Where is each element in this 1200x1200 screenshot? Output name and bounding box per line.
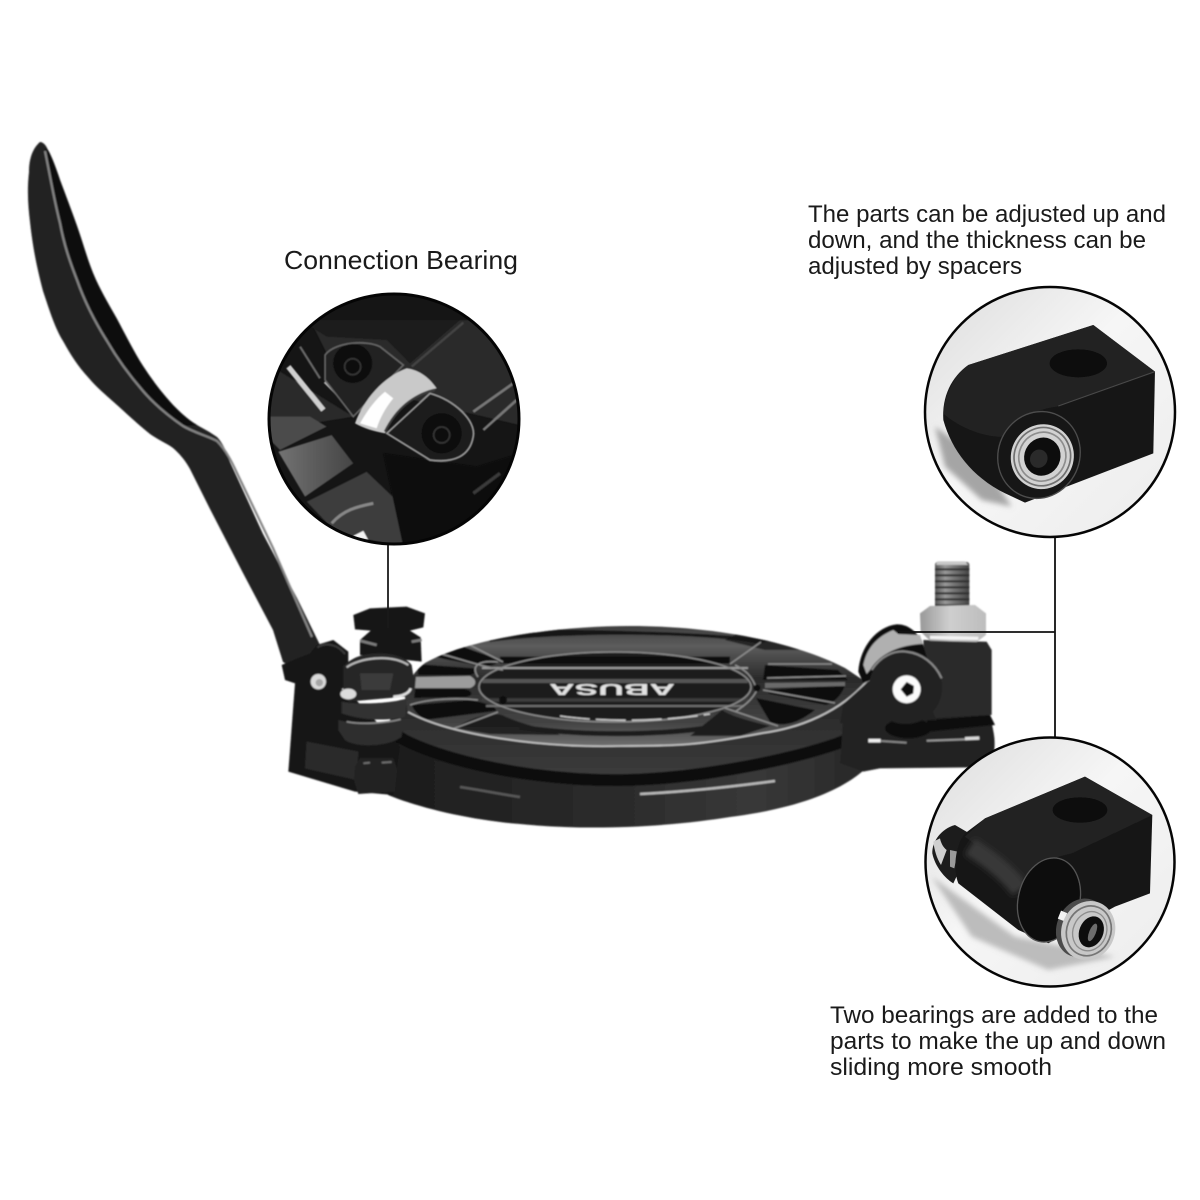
leader line: connection bearing (387, 540, 389, 628)
recesses (412, 628, 848, 736)
callout circle: block with bearing (924, 286, 1176, 538)
text block: two bearings: parts to make the up and down (830, 1028, 1166, 1055)
right assembly: block, bolt, pivot and foot (840, 561, 995, 772)
base disc (385, 690, 878, 828)
handle (28, 142, 320, 672)
upper bracket and screw (325, 343, 403, 417)
text block: adjustable parts: adjusted by spacers (808, 253, 1022, 280)
inner oval (479, 652, 751, 722)
drop shadow (932, 877, 1115, 970)
text block: two bearings: Two bearings are added to the (830, 1002, 1158, 1029)
riser block (923, 640, 992, 718)
lower post (354, 758, 397, 794)
callout circle: block with bearing removed (925, 737, 1175, 987)
brand lettering: ABUSA (549, 680, 675, 697)
bearing (997, 410, 1081, 500)
pivot neck (840, 677, 937, 723)
heading: connection bearing: Connection Bearing (284, 245, 518, 275)
text block: adjustable parts (808, 201, 1166, 280)
foot (840, 715, 995, 772)
left assembly: bracket, knobs and pivot (282, 607, 425, 795)
spokes (410, 642, 846, 730)
text block: adjustable parts: The parts can be adjusted up and (808, 201, 1166, 228)
rear knob (353, 607, 425, 662)
lower bracket and screw (387, 393, 474, 461)
loose bearing (1056, 898, 1116, 960)
hex socket (893, 675, 921, 703)
text block: two bearings (830, 1002, 1166, 1081)
leader lines: adjustable parts (898, 535, 1055, 770)
callout circle: connection bearing close-up (267, 293, 527, 547)
handle pivot (282, 640, 360, 693)
threaded bolt (935, 561, 969, 610)
hex nut (920, 605, 986, 642)
steel bearing ring (355, 368, 437, 433)
pivot wheel (869, 651, 942, 724)
bracket (288, 683, 400, 795)
curved arm (858, 624, 927, 683)
product: tortilla press (28, 142, 995, 828)
block body (955, 777, 1152, 943)
plate rim and groove (395, 680, 868, 780)
left bearing stub (932, 825, 975, 883)
text block: two bearings: sliding more smooth (830, 1054, 1052, 1081)
front knob (343, 653, 415, 702)
top plate (400, 620, 880, 750)
text block: adjustable parts: down, and the thickness can be (808, 227, 1146, 254)
drop shadow (935, 427, 1012, 507)
